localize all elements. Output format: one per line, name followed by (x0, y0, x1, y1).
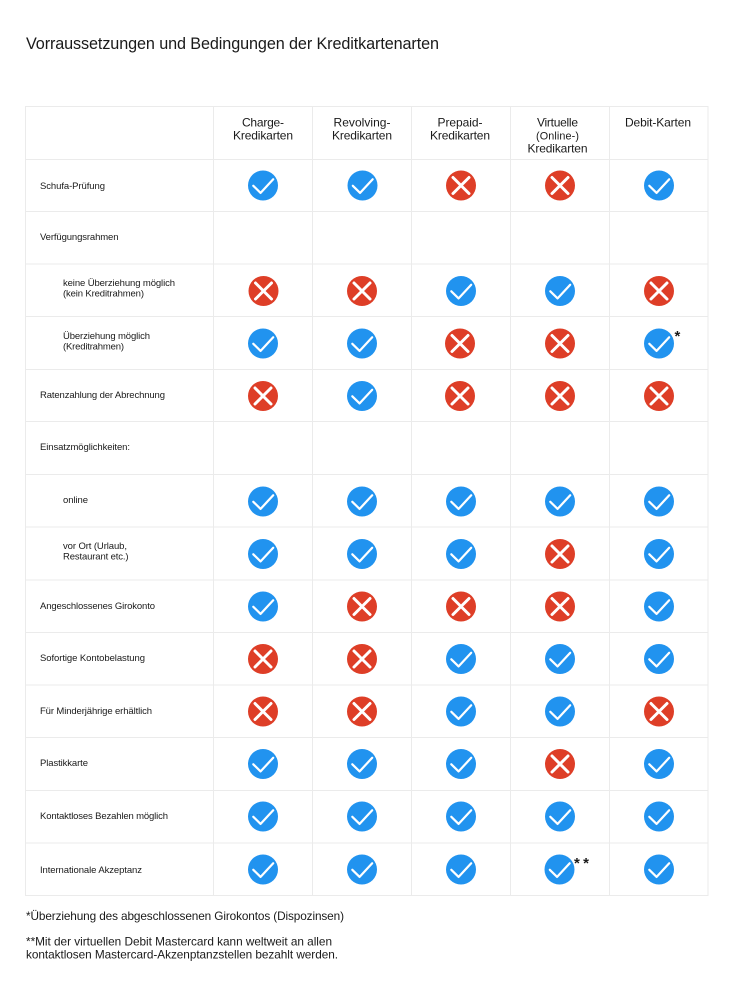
header: Charge-Kreditkarten: Kredikarten (233, 128, 293, 142)
label: Plastikkarte: Plastikkarte (40, 758, 88, 769)
label: Kontaktloses Bezahlen möglich: Kontaktloses Bezahlen möglich (40, 811, 168, 822)
row icons: keine Überziehung (248, 276, 674, 306)
label: Für Minderjährige erhältlich: Für Minderjährige erhältlich (40, 706, 152, 717)
header: Virtuelle Kreditkarten: Virtuelle (537, 116, 578, 130)
row icons: Überziehung möglich (248, 328, 674, 358)
label: keine Überziehung möglich: keine Überziehung möglich (63, 278, 175, 289)
label: Ratenzahlung der Abrechnung: Ratenzahlung der Abrechnung (40, 390, 165, 401)
header: Revolving-Kreditkarten: Kredikarten (332, 128, 392, 142)
row icons: online (248, 486, 674, 516)
header: Prepaid-Kreditkarten: Prepaid- (438, 116, 482, 130)
header: Virtuelle Kreditkarten: (Online-) (536, 130, 579, 142)
label: Überziehung möglich: (Kreditrahmen) (63, 342, 124, 352)
label: Angeschlossenes Girokonto: Angeschlossenes Girokonto (40, 601, 155, 612)
label: Sofortige Kontobelastung: Sofortige Kontobelastung (40, 653, 145, 664)
row icons: Für Minderjährige (248, 696, 674, 726)
row icons: Angeschlossenes Girokonto (248, 592, 674, 622)
row icons: Plastikkarte (248, 749, 674, 779)
footnote 1: *Überziehung des abgeschlossenen Girokontos (Dispozinsen) (26, 909, 344, 923)
header: Virtuelle Kreditkarten: Kredikarten (528, 142, 588, 156)
label: keine Überziehung möglich: (kein Kreditrahmen) (63, 288, 144, 300)
footnote 2: **Mit der virtuellen Debit Mastercard kann weltweit an allen (26, 934, 332, 948)
label: Überziehung möglich: Überziehung möglich (63, 331, 150, 342)
row icons: Sofortige Kontobelastung (248, 644, 674, 674)
label: vor Ort: Restaurant etc.) (63, 552, 128, 562)
label: vor Ort: vor Ort (Urlaub, (63, 541, 127, 552)
header: Prepaid-Kreditkarten: Kredikarten (430, 128, 490, 142)
row icons: Internationale Akzeptanz (248, 854, 674, 884)
asterisk: Debit-Karten overdraft: * (674, 328, 680, 345)
header: Debit-Karten: Debit-Karten (625, 116, 691, 130)
label: Einsatzmöglichkeiten: Einsatzmöglichkeiten: (40, 442, 130, 453)
row icons: Ratenzahlung (248, 381, 674, 411)
label: online: online (63, 495, 88, 506)
asterisks: virtual card: ** (574, 855, 589, 872)
column headers (233, 116, 691, 156)
label: Schufa-Prüfung: Schufa-Prüfung (40, 181, 105, 192)
label: Internationale Akzeptanz: Internationale Akzeptanz (40, 865, 142, 876)
row icons: Kontaktloses Bezahlen (248, 802, 674, 832)
header: Revolving-Kreditkarten: Revolving- (334, 116, 390, 130)
label: Verfügungsrahmen: Verfügungsrahmen (40, 232, 118, 243)
row icons: vor Ort (248, 539, 674, 569)
row labels (40, 181, 175, 876)
row icons: Schufa-Prüfung (248, 170, 674, 200)
footnote 2: kontaktlosen Mastercard-Akzenptanzstellen bezahlt werden. (26, 948, 338, 962)
icon matrix (248, 170, 674, 884)
title: Vorraussetzungen und Bedingungen der Kreditkartenarten (26, 35, 439, 53)
header: Charge-Kreditkarten: Charge- (242, 116, 284, 130)
footnotes (26, 909, 344, 962)
